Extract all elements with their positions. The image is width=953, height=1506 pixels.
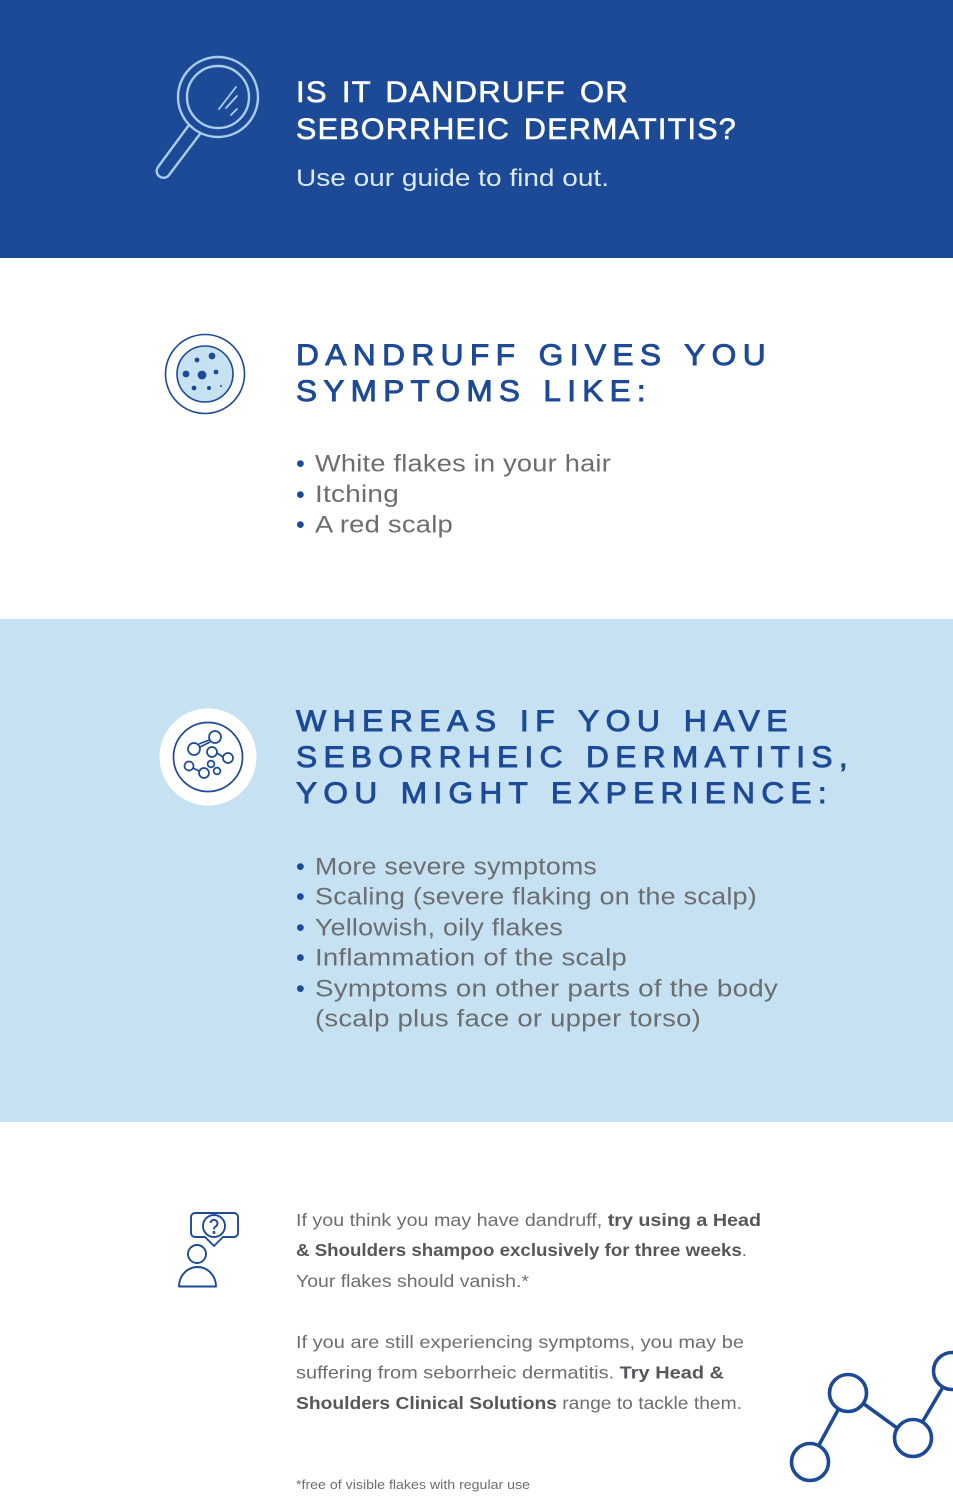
list: seborrheic dermatitis symptoms: •: [296, 975, 305, 1003]
heading: dandruff: DANDRUFF GIVES YOU: [296, 339, 772, 372]
heading: seborrheic dermatitis: [296, 705, 854, 810]
heading: seborrheic dermatitis: SEBORRHEIC DERMATITIS,: [296, 741, 854, 774]
footnote: *free of visible flakes with regular use: [296, 1478, 530, 1492]
list: seborrheic dermatitis symptoms: Yellowish, oily flakes: [315, 914, 563, 942]
list: seborrheic dermatitis symptoms: •: [296, 944, 305, 972]
heading: dandruff: SYMPTOMS LIKE:: [296, 375, 652, 408]
panel: header: [0, 0, 953, 258]
list: seborrheic dermatitis symptoms: Inflammation of the scalp: [315, 944, 627, 972]
subtitle: Use our guide to find out.: [296, 165, 609, 192]
icon: magnifying glass: [157, 57, 258, 178]
list: dandruff symptoms: •: [296, 450, 305, 478]
text: seborrheic dermatitis advice: suffering from seborrheic dermatitis. Try Head &: [296, 1362, 724, 1382]
panel: dandruff: [166, 334, 772, 539]
list: seborrheic dermatitis symptoms: More severe symptoms: [315, 854, 597, 880]
list: seborrheic dermatitis symptoms: •: [296, 883, 305, 911]
text: seborrheic dermatitis advice: If you are still experiencing symptoms, you may be: [296, 1332, 744, 1352]
text: dandruff advice: & Shoulders shampoo exclusively for three weeks .: [296, 1240, 747, 1260]
list: dandruff symptoms: [296, 450, 611, 539]
title: [296, 76, 737, 146]
title: SEBORRHEIC DERMATITIS?: [296, 113, 737, 146]
list: dandruff symptoms: •: [296, 511, 305, 539]
list: seborrheic dermatitis symptoms: Symptoms on other parts of the body: [315, 976, 778, 1002]
icon: person with question: [179, 1213, 238, 1286]
text: seborrheic dermatitis advice: [296, 1332, 744, 1413]
icon: scalp with flakes: [166, 334, 244, 414]
list: seborrheic dermatitis symptoms: •: [296, 914, 305, 942]
heading: dandruff: [296, 339, 772, 408]
icon: cells: [160, 708, 256, 806]
heading: seborrheic dermatitis: YOU MIGHT EXPERIENCE:: [296, 777, 833, 810]
list: seborrheic dermatitis symptoms: [296, 853, 778, 1032]
panel: seborrheic dermatitis: [0, 619, 953, 1122]
text: dandruff advice: If you think you may have dandruff, try using a Head: [296, 1210, 761, 1230]
title: IS IT DANDRUFF OR: [296, 76, 629, 109]
icon: molecule decoration: [792, 1352, 953, 1480]
heading: seborrheic dermatitis: WHEREAS IF YOU HAVE: [296, 705, 794, 738]
list: dandruff symptoms: White flakes in your hair: [315, 450, 611, 478]
list: dandruff symptoms: •: [296, 481, 305, 509]
list: seborrheic dermatitis symptoms: (scalp plus face or upper torso): [315, 1006, 701, 1032]
list: dandruff symptoms: Itching: [315, 481, 399, 508]
list: seborrheic dermatitis symptoms: Scaling (severe flaking on the scalp): [315, 884, 757, 910]
list: seborrheic dermatitis symptoms: •: [296, 853, 305, 881]
text: seborrheic dermatitis advice: Shoulders Clinical Solutions range to tackle them.: [296, 1393, 742, 1413]
text: dandruff advice: [296, 1210, 761, 1291]
panel: advice: [179, 1210, 953, 1492]
list: dandruff symptoms: A red scalp: [315, 512, 453, 538]
text: dandruff advice: Your flakes should vanish.*: [296, 1271, 529, 1291]
